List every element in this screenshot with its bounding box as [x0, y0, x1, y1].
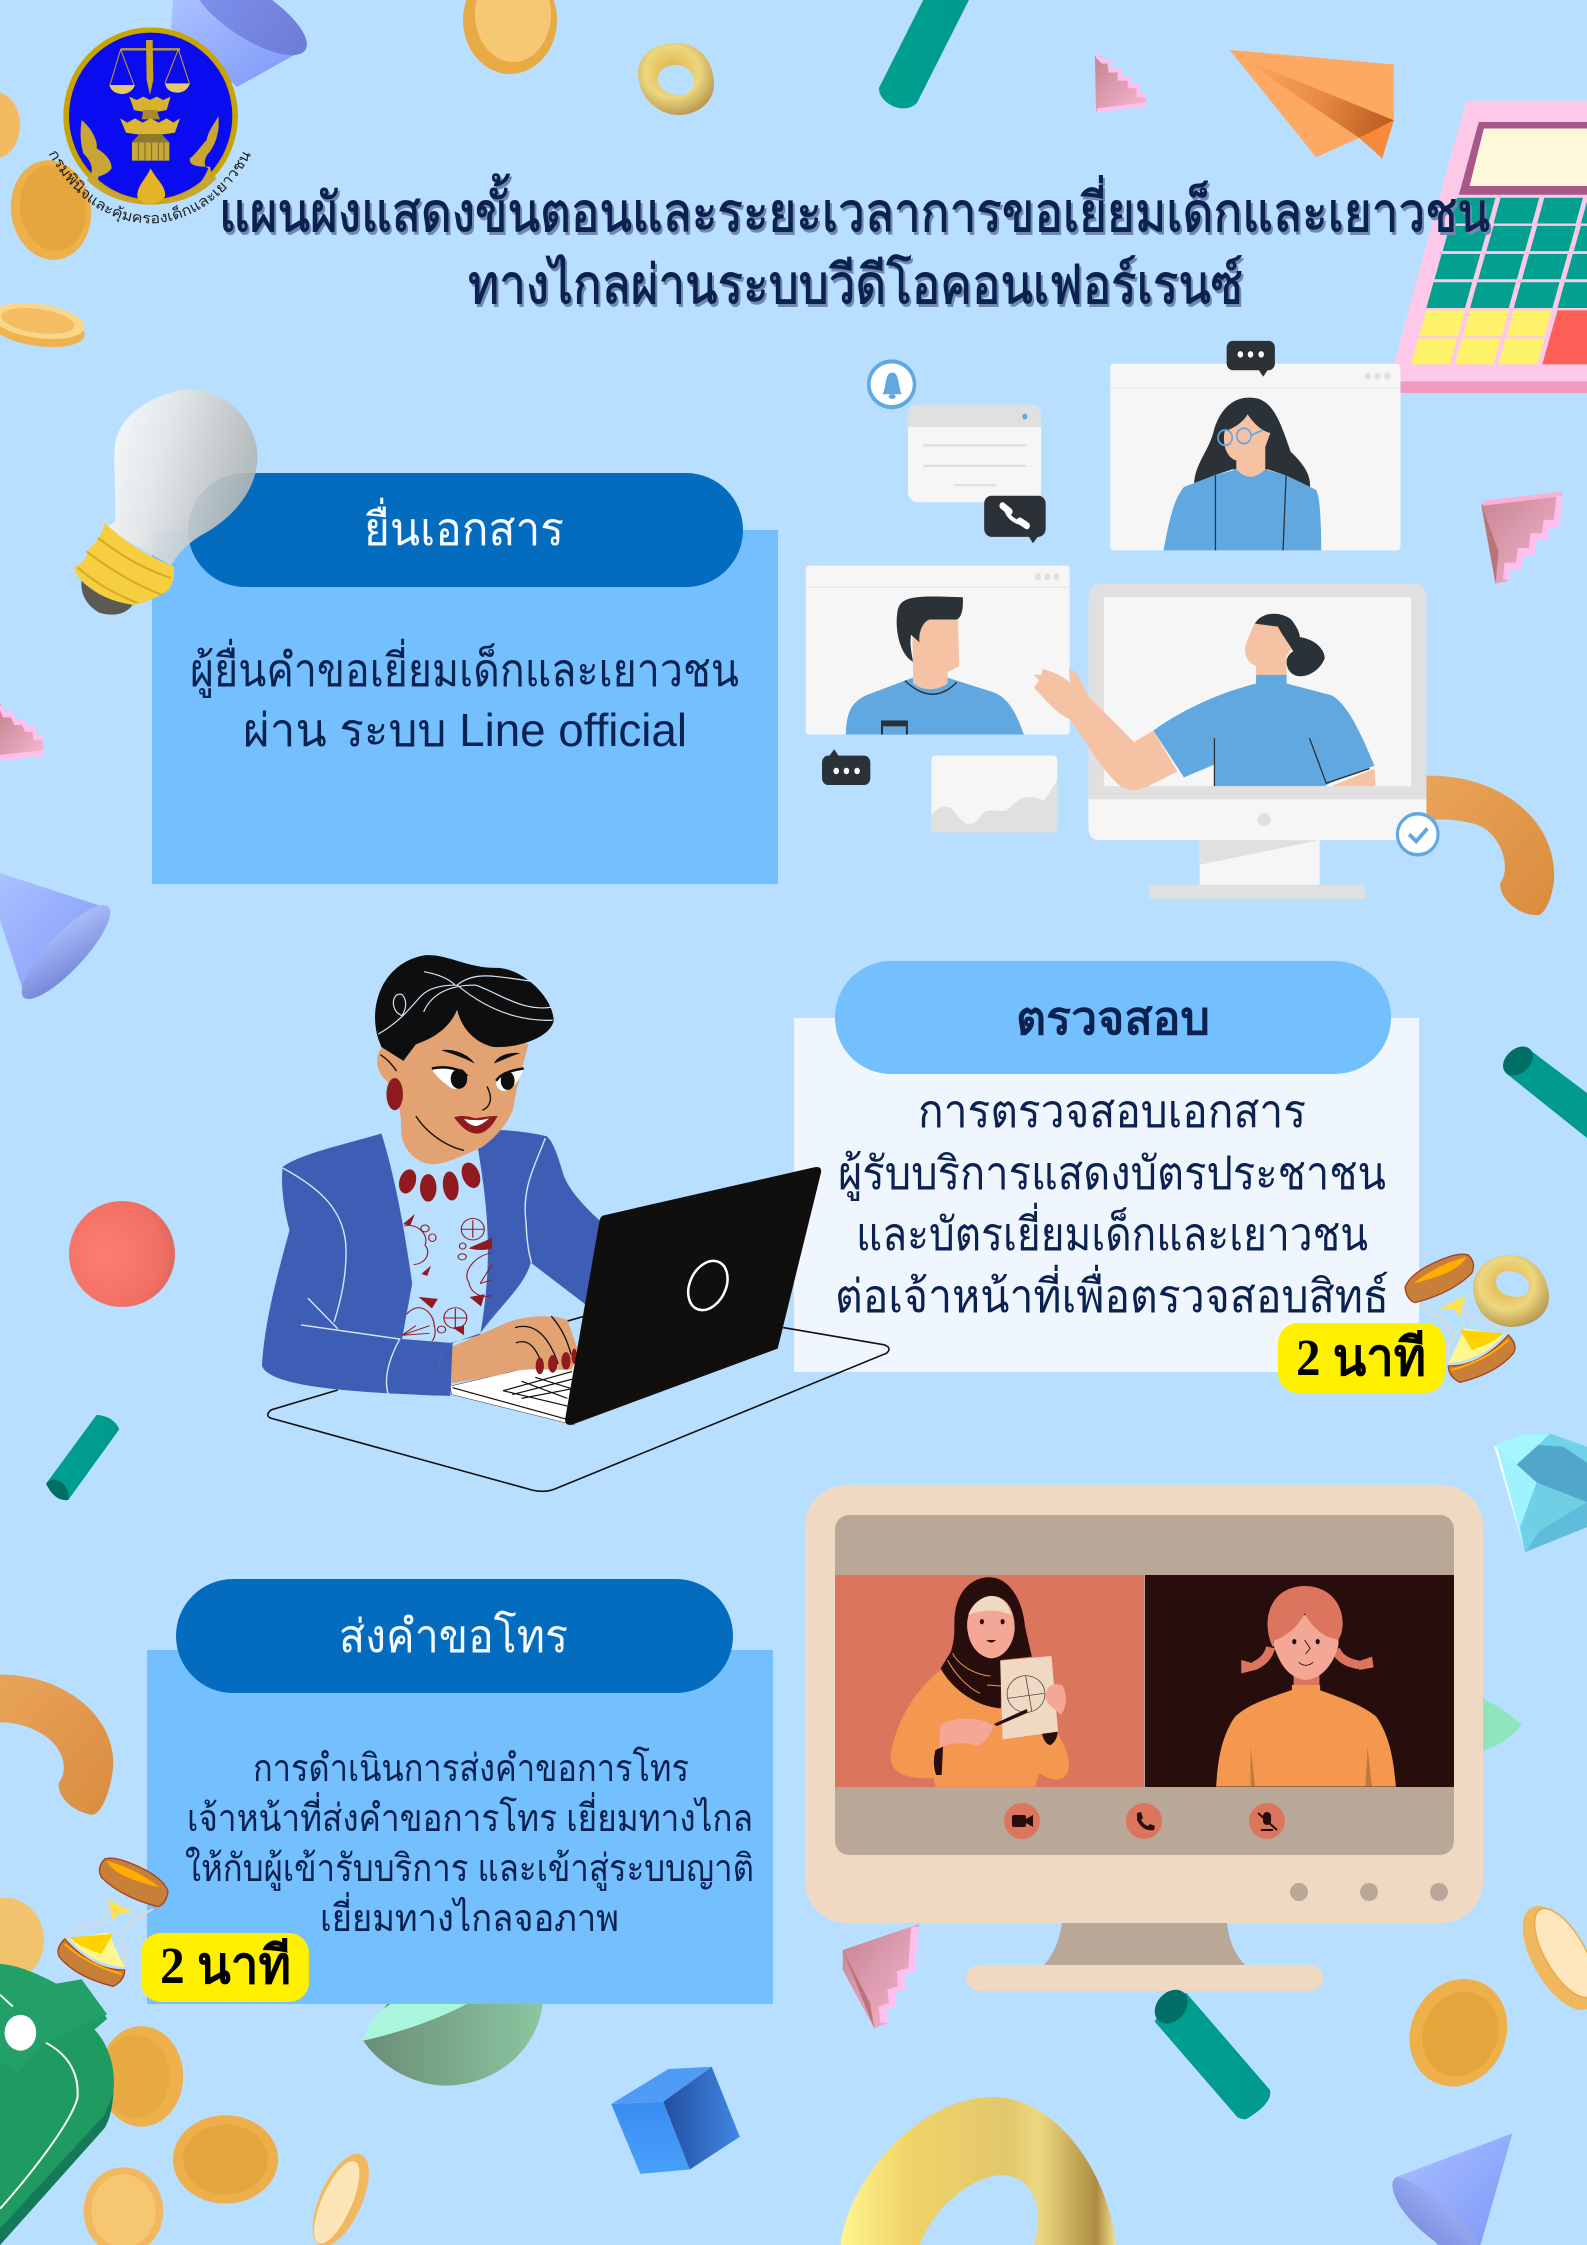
decoration: mint behind monitor [1466, 1690, 1522, 1755]
icon: dots bubble bottom [822, 749, 870, 785]
decoration: paper plane [1230, 50, 1394, 158]
panel: step 1 submit documents [152, 473, 778, 884]
decoration: pink stairs left [0, 703, 44, 759]
icon: dots bubble top [1227, 341, 1275, 377]
desk right edge over panel [742, 1328, 889, 1413]
decoration: calculator [1394, 101, 1587, 393]
badge: 2 minutes step 2: 2 นาที [1296, 1329, 1426, 1387]
icon: hourglass left [58, 1858, 168, 1986]
notification card [908, 405, 1041, 502]
decoration: teal small [46, 1415, 119, 1500]
step 1 pill: ยื่นเอกสาร [364, 497, 564, 555]
decoration: mint half sphere [363, 1997, 543, 2086]
face and neck [377, 1012, 528, 1164]
people in call [891, 1577, 1396, 1787]
arm reaching out [1034, 669, 1177, 790]
step 3 body text: การดำเนินการส่งคำขอการโทร [253, 1746, 689, 1790]
decoration: coin edge right [1508, 1894, 1587, 2022]
step 3 body text [185, 1746, 754, 1940]
window: man [806, 566, 1070, 735]
decoration: large yellow donut [840, 2097, 1116, 2245]
step 1 body text: ผ่าน ระบบ Line official [243, 704, 687, 756]
step 3 body text: เจ้าหน้าที่ส่งคำขอการโทร เยี่ยมทางไกล [187, 1792, 753, 1840]
decoration: bottom right group [843, 1924, 1515, 2245]
decoration: top cone [171, 0, 318, 87]
jacket [262, 1130, 600, 1396]
monitor with video call [805, 1485, 1483, 1991]
jacket cuff [416, 1343, 453, 1396]
step 3 body text: เยี่ยมทางไกลจอภาพ [320, 1892, 619, 1940]
scales [109, 40, 190, 95]
eyes and brows [380, 1050, 524, 1150]
icon: bell [869, 361, 915, 407]
teal cylinder bottom [1149, 1987, 1270, 2119]
title [219, 174, 1490, 315]
monitor stand [1044, 1923, 1245, 1965]
laptop logo [681, 1257, 734, 1314]
decoration: orange arch [1426, 776, 1554, 915]
jacket seams [283, 1138, 545, 1395]
coin [1402, 1976, 1515, 2090]
icon: check badge [1397, 814, 1438, 855]
title: ทางไกลผ่านระบบวีดีโอคอนเฟอร์เรนซ์ [468, 254, 1243, 315]
monitor [1088, 584, 1426, 899]
monitor buttons [1290, 1883, 1448, 1901]
panel: step 3 body [147, 1579, 773, 2004]
emblem curved name: กรมพินิจและคุ้มครองเด็กและเยาวชน [49, 151, 250, 224]
decoration: teal cylinder [879, 0, 969, 108]
decoration: cube [611, 2067, 740, 2174]
person: hijab woman [891, 1577, 1069, 1787]
hand [439, 1316, 579, 1385]
fingers and nails [515, 1316, 577, 1374]
earring [386, 1078, 403, 1110]
decoration: pink stairs top [1095, 56, 1147, 111]
step 2 body text: และบัตรเยี่ยมเด็กและเยาวชน [856, 1202, 1368, 1260]
decoration: left edge group [0, 703, 121, 1500]
step 2 pill [835, 961, 1391, 1074]
step 3 pill [176, 1579, 733, 1693]
step 1 body text [190, 638, 739, 756]
blouse flowers [402, 1219, 492, 1341]
naga left and right [81, 116, 219, 204]
desk outline [268, 1316, 742, 1491]
window: woman with glasses [1110, 364, 1400, 550]
step 1 pill [188, 473, 743, 587]
decoration: z2 group top right [879, 0, 1587, 915]
decoration: coins bottom left [0, 1898, 380, 2245]
decoration: arch left [0, 1674, 113, 1815]
decoration: coins top left [0, 0, 557, 352]
decoration: diamond [1494, 1434, 1587, 1552]
hair [375, 955, 554, 1061]
card: wave chart [931, 756, 1057, 833]
lips [454, 1116, 498, 1134]
step 2 pill: ตรวจสอบ [1016, 992, 1210, 1044]
decoration: step 3 surroundings [0, 1674, 740, 2245]
keyboard [450, 1356, 577, 1425]
flame [137, 168, 165, 204]
call controls [1004, 1803, 1285, 1839]
icon: phone bubble [984, 496, 1046, 543]
badge: 2 minutes step 3: 2 นาที [160, 1937, 291, 1995]
icon: lightbulb body [74, 389, 258, 605]
pink stairs bottom [843, 1924, 919, 2028]
laptop lid [565, 1167, 821, 1425]
lotus tiers [120, 97, 180, 161]
left video [835, 1575, 1144, 1787]
illustration: video call group [806, 341, 1438, 899]
step 1 body text: ผู้ยื่นคำขอเยี่ยมเด็กและเยาวชน [190, 638, 739, 698]
step 2 body text: ผู้รับบริการแสดงบัตรประชาชน [838, 1147, 1386, 1201]
woman with laptop illustration [262, 955, 742, 1491]
decoration: red ball [69, 1201, 175, 1307]
monitor screen [835, 1515, 1454, 1855]
person: girl with braids [1216, 1586, 1396, 1787]
icon: lightbulb tip [81, 579, 133, 615]
decoration: cone left [0, 873, 121, 1010]
step 2 body text: ต่อเจ้าหน้าที่เพื่อตรวจสอบสิทธ์ [835, 1264, 1389, 1322]
logo emblem [49, 27, 250, 224]
step 2 body text [835, 1085, 1389, 1322]
cone bottom right [1392, 2133, 1512, 2245]
laptop over panel [565, 1167, 889, 1425]
monitor base [966, 1965, 1323, 1991]
step 3 pill: ส่งคำขอโทร [339, 1610, 568, 1662]
necklace [396, 1161, 483, 1202]
step 2 body text: การตรวจสอบเอกสาร [918, 1085, 1306, 1137]
right video [1145, 1575, 1454, 1787]
decoration: pink stairs right [1481, 493, 1562, 584]
badge: 2 minutes step 3 [141, 1933, 309, 2002]
decoration: donut top [638, 43, 714, 115]
monitor frame [805, 1485, 1483, 1923]
decoration: green wallet [0, 1964, 114, 2245]
badge: 2 minutes step 2 [1278, 1323, 1445, 1393]
step 3 body text: ให้กับผู้เข้ารับบริการ และเข้าสู่ระบบญาติ [185, 1847, 754, 1891]
decoration: right edge teal and donut [1473, 1041, 1587, 1327]
hair highlights [378, 972, 553, 1034]
icon: hourglass right [1405, 1254, 1515, 1382]
panel: step 2 verification [794, 961, 1419, 1372]
